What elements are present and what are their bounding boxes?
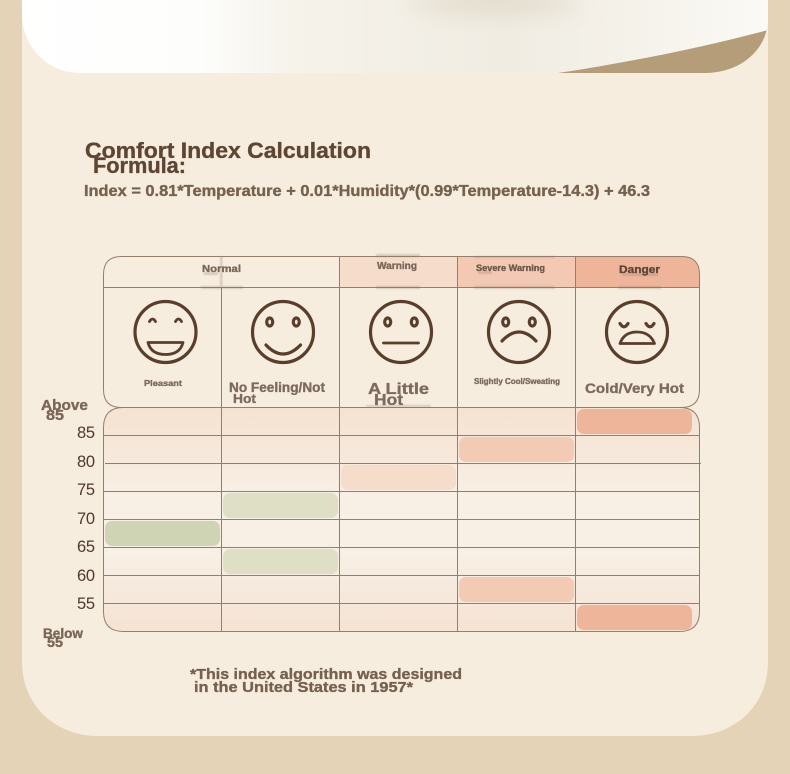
caption: a little hot: Hot: [374, 392, 404, 409]
caption: pleasant: Pleasant: [144, 378, 182, 388]
caption: no feeling: No Feeling/Not: [229, 380, 326, 395]
icon: very hot face: [606, 302, 668, 362]
axis numbers: 85: [77, 424, 95, 442]
footnote: in the United States in 1957*: [194, 679, 413, 696]
label: danger: Danger: [619, 264, 661, 276]
caption: a little hot: [368, 381, 429, 409]
caption: no feeling: Hot: [233, 391, 257, 406]
label: severe warning: Severe Warning: [476, 263, 545, 273]
bar: danger above 85: [577, 409, 692, 434]
caption: no feeling: [229, 380, 326, 406]
bar: a little hot 75-80: [341, 465, 456, 490]
axis numbers: 60: [77, 567, 95, 585]
axis numbers: 55: [77, 595, 95, 613]
retouch smudges around header labels: [201, 254, 661, 407]
axis label: below 55: 55: [47, 635, 64, 650]
axis label: above 85: Above: [41, 398, 88, 414]
header row fills: [340, 256, 700, 288]
axis numbers: [77, 424, 95, 613]
icon: pleasant face: [135, 302, 196, 362]
highlight bars: [105, 409, 692, 630]
axis label: below 55: Below: [43, 626, 83, 641]
footnote: [190, 666, 462, 696]
axis numbers: 75: [77, 481, 95, 499]
footnote: *This index algorithm was designed: [190, 666, 462, 683]
table lines: [104, 256, 701, 632]
bar: pleasant 65-70: [105, 521, 220, 546]
icon: slightly cool face: [488, 302, 550, 362]
axis label: below 55: [43, 626, 83, 650]
axis label: above 85: [41, 398, 88, 424]
axis numbers: 70: [77, 510, 95, 528]
y axis labels: [41, 398, 95, 650]
severity header labels: [202, 261, 661, 276]
scale grid background: [104, 408, 700, 632]
heading: Formula:: [93, 153, 186, 178]
icon: a little hot face: [370, 302, 432, 362]
face captions: [144, 377, 684, 409]
bar: no feeling 60-65: [223, 549, 338, 574]
hero photo: white product close-up: [22, 0, 768, 73]
table: [104, 254, 701, 632]
label: warning: Warning: [377, 261, 417, 272]
axis numbers: 80: [77, 453, 95, 471]
caption: a little hot: A Little: [368, 381, 429, 398]
bar: danger below 55: [577, 605, 692, 630]
bar: severe warning 55-60: [459, 577, 574, 602]
icon: no feeling face: [252, 302, 314, 362]
caption: cold or very hot: Cold/Very Hot: [585, 380, 684, 396]
formula text: Index = 0.81*Temperature + 0.01*Humidity*(0.99*Temperature-14.3) + 46.3: [84, 183, 650, 200]
caption: slightly cool: Slightly Cool/Sweating: [474, 377, 560, 386]
bar: no feeling 70-75: [223, 493, 338, 518]
label: normal: Normal: [202, 263, 241, 275]
axis label: above 85: 85: [46, 408, 64, 424]
heading: Comfort Index Calculation: [85, 138, 371, 163]
heading: [85, 138, 371, 178]
axis numbers: 65: [77, 538, 95, 556]
bar: severe warning 80-85: [459, 437, 574, 462]
